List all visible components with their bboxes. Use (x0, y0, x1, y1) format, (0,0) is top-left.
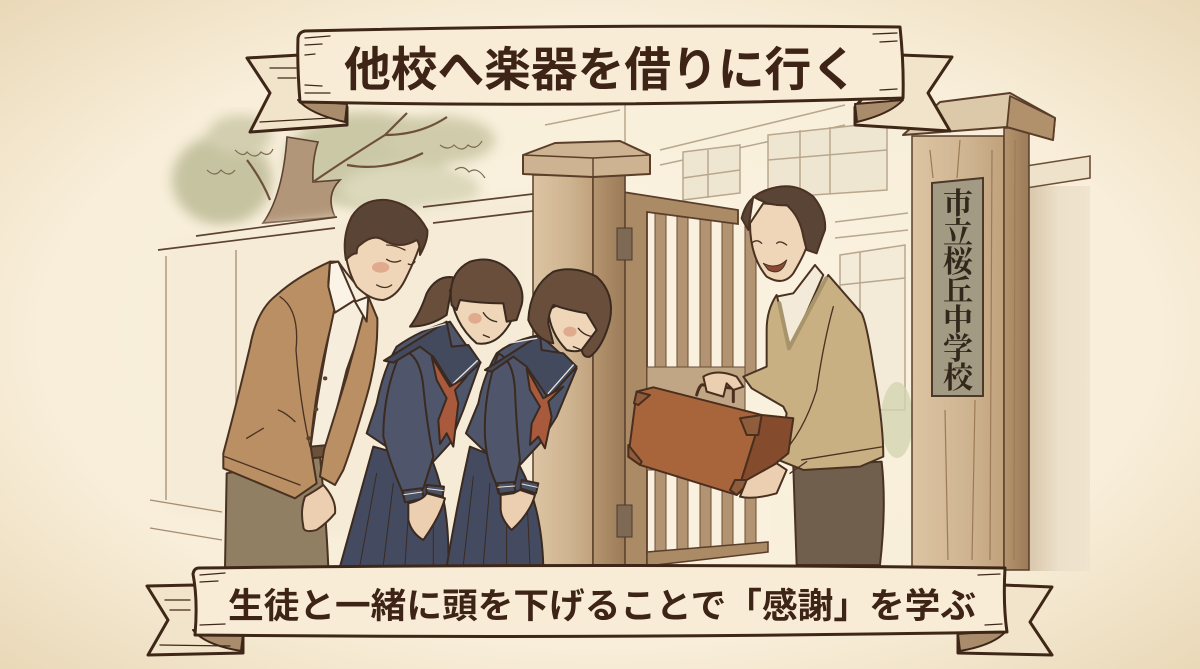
school name plaque (932, 178, 983, 396)
left gate pillar (523, 141, 650, 567)
tree behind the wall (172, 112, 495, 225)
shirt (777, 265, 823, 350)
smiling eyes and mouth (752, 241, 787, 245)
skirt pleats (463, 477, 530, 565)
top ribbon banner (247, 26, 952, 132)
beige sweater (743, 275, 883, 470)
left tail (247, 55, 347, 132)
blush (372, 262, 389, 273)
cuffs (497, 480, 538, 494)
collar stripes (417, 324, 477, 383)
sleeve and hem (778, 307, 883, 473)
school name plaque: 桜 (943, 246, 974, 279)
sleeve (485, 353, 520, 493)
bob hair (528, 269, 611, 357)
old brown suitcase (628, 372, 793, 498)
suitcase corners (628, 392, 762, 495)
navy pleated skirt (340, 447, 448, 567)
school name plaque: 中 (943, 304, 973, 337)
right tail (958, 585, 1052, 655)
suitcase side (737, 415, 793, 495)
shrub beside the teacher (881, 382, 913, 458)
hair (451, 259, 522, 322)
clasped hands (302, 485, 335, 531)
closed eye and mouth (573, 328, 595, 349)
left tail (147, 585, 243, 655)
school name plaque: 丘 (943, 275, 973, 308)
cuffs (403, 485, 444, 502)
red scarf (527, 368, 563, 448)
left cardigan panel (223, 262, 335, 498)
right tail (855, 55, 952, 131)
wooden lattice gate (623, 192, 770, 566)
blush (468, 313, 482, 324)
sailor collar (485, 335, 577, 398)
shirt collar (328, 262, 368, 322)
hair (345, 200, 427, 260)
navy pleated skirt (447, 447, 543, 567)
hair (742, 186, 825, 253)
suitcase handle (697, 385, 733, 402)
trousers (793, 462, 884, 565)
school name plaque: 立 (943, 217, 973, 250)
wall to the right of the gate (1026, 156, 1090, 571)
trousers (225, 457, 328, 568)
hand under suitcase (740, 463, 787, 498)
blush (563, 327, 577, 337)
school name plaque: 学 (943, 333, 973, 366)
figure: male teacher bowing (223, 200, 427, 568)
right gate pillar (903, 93, 1055, 570)
skirt pleats (360, 473, 433, 565)
closed eye and mouth (483, 313, 497, 337)
suitcase front (628, 387, 762, 495)
face (450, 277, 522, 344)
figure: student with ponytail bowing (340, 259, 522, 567)
face (345, 220, 422, 300)
figure: host teacher handing over suitcase (742, 186, 884, 565)
ribbon shading lines (160, 573, 1002, 646)
collar stripes (508, 338, 573, 393)
school building behind gate (545, 105, 908, 410)
belt (311, 445, 328, 458)
banner caption: 生徒と一緒に頭を下げることで「感謝」を学ぶ (228, 587, 976, 626)
sailor blouse (466, 335, 577, 465)
hands (408, 493, 445, 540)
ribbon body (193, 566, 1007, 636)
shirt (311, 262, 368, 447)
closed eyes and smile (377, 245, 415, 287)
hands (501, 490, 535, 530)
sleeve and pocket (225, 297, 310, 485)
bottom ribbon banner (147, 566, 1052, 655)
ponytail (410, 277, 453, 327)
left boundary wall (150, 193, 533, 566)
sailor collar (384, 322, 481, 388)
school name plaque: 校 (943, 362, 975, 395)
folded undersides (298, 100, 903, 122)
face (548, 297, 602, 351)
red scarf (432, 357, 467, 447)
banner title: 他校へ楽器を借りに行く (344, 43, 858, 96)
folded undersides (193, 630, 1007, 651)
ribbon shading lines (260, 33, 897, 122)
cardigan buttons (308, 378, 325, 438)
face (750, 203, 814, 281)
V-neck rib (779, 278, 826, 348)
right cardigan panel (320, 297, 377, 485)
figure: student with bob hair bowing (447, 269, 611, 567)
ribbon body (298, 26, 903, 104)
sailor blouse (367, 322, 480, 462)
hand on handle (703, 372, 743, 397)
sleeve (383, 350, 433, 502)
school name plaque: 市 (943, 188, 973, 221)
